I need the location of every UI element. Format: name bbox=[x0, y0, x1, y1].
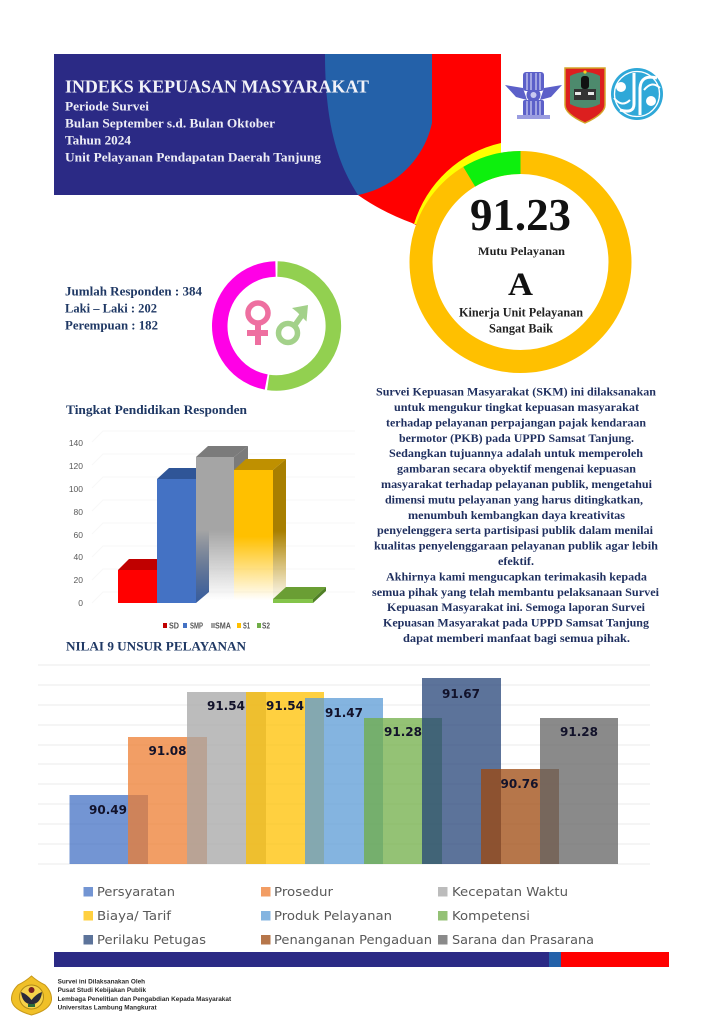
legend: service elements: Persyaratan bbox=[97, 884, 175, 899]
description paragraph: Kepuasan Masyarakat ini. Semoga laporan Survei bbox=[387, 600, 646, 614]
bar: SD bbox=[118, 559, 168, 603]
shape: yellow rim bbox=[414, 143, 501, 226]
description paragraph bbox=[372, 385, 660, 645]
value labels: 91.67 bbox=[442, 687, 480, 701]
value labels: 91.08 bbox=[149, 744, 186, 758]
icon: winged emblem bbox=[505, 72, 562, 119]
shape: red header accent bbox=[358, 54, 501, 232]
description paragraph: Sedangkan tujuannya adalah untuk memperoleh bbox=[389, 446, 643, 460]
respondent counts bbox=[65, 284, 202, 332]
footer colour bar bbox=[54, 952, 669, 967]
legend: service elements: Kompetensi bbox=[452, 908, 530, 923]
value labels bbox=[89, 687, 598, 817]
3d bar chart: education bbox=[69, 431, 355, 630]
footer logo bbox=[11, 976, 52, 1015]
survey period text: Unit Pelayanan Pendapatan Daerah Tanjung bbox=[65, 150, 322, 165]
bars bbox=[70, 678, 618, 864]
description paragraph: penyelenggera serta partisipasi publik dalam menilai bbox=[377, 523, 654, 537]
ring: gauge amber bbox=[421, 162, 620, 362]
bar chart: nine service elements bbox=[38, 665, 650, 864]
description paragraph: gambaran secara obyektif mengenai kepuasan bbox=[397, 462, 636, 476]
y axis labels: 100 bbox=[69, 484, 83, 494]
arc: male share bbox=[268, 269, 333, 383]
legend: service elements: Perilaku Petugas bbox=[97, 932, 206, 947]
value labels: 91.28 bbox=[560, 725, 598, 739]
icon: male symbol bbox=[278, 305, 308, 342]
shape: navy header panel bbox=[54, 54, 358, 195]
respondent counts: Perempuan : 182 bbox=[65, 317, 158, 332]
chart legend: SMA bbox=[215, 622, 231, 630]
icon: round blue logo bbox=[611, 68, 663, 120]
survey period text: Tahun 2024 bbox=[65, 132, 132, 147]
description paragraph: kualitas penyelenggaraan pelayanan publik agar lebih bbox=[374, 539, 658, 553]
y axis labels: 140 bbox=[69, 438, 83, 448]
bar: S2 bbox=[273, 587, 326, 603]
legend: service elements: Prosedur bbox=[274, 884, 334, 899]
value labels: 90.49 bbox=[89, 803, 127, 817]
respondent counts: Jumlah Responden : 384 bbox=[65, 284, 202, 299]
footer credit text: Pusat Studi Kebijakan Publik bbox=[58, 987, 146, 994]
ring: gauge green segment bbox=[463, 151, 520, 187]
description paragraph: bermotor (PKB) pada UPPD Samsat Tanjung. bbox=[399, 431, 634, 445]
chart legend: S2 bbox=[262, 622, 270, 630]
survey period text: Bulan September s.d. Bulan Oktober bbox=[65, 115, 275, 130]
bar: S1 bbox=[234, 459, 286, 603]
grade letter: A bbox=[508, 267, 533, 303]
value labels: 91.54 bbox=[207, 699, 245, 713]
description paragraph: dapat memberi manfaat bagi semua pihak. bbox=[403, 631, 630, 645]
description paragraph: semua pihak yang telah membantu pelaksanaan Survei bbox=[372, 585, 660, 599]
y axis labels: 60 bbox=[74, 530, 83, 540]
label: mutu pelayanan: Mutu Pelayanan bbox=[478, 244, 565, 258]
heading: nine elements: NILAI 9 UNSUR PELAYANAN bbox=[66, 639, 247, 654]
label: sangat baik: Sangat Baik bbox=[489, 322, 553, 336]
gender donut bbox=[220, 269, 333, 383]
description paragraph: masyarakat terhadap pelayanan publik, mengetahui bbox=[381, 477, 653, 491]
chart legend bbox=[163, 622, 270, 630]
value labels: 91.28 bbox=[384, 725, 422, 739]
legend: service elements: Produk Pelayanan bbox=[274, 908, 392, 923]
footer credit text: Lembaga Penelitian dan Pengabdian Kepada Masyarakat bbox=[58, 996, 232, 1003]
bar: SMA bbox=[196, 446, 248, 603]
legend: service elements: Penanganan Pengaduan bbox=[274, 932, 432, 947]
y axis labels: 40 bbox=[74, 552, 83, 562]
score value: 91.23 bbox=[470, 190, 571, 240]
value labels: 91.47 bbox=[325, 706, 363, 720]
y axis labels: 120 bbox=[69, 461, 83, 471]
survey period text bbox=[65, 99, 322, 165]
legend: service elements bbox=[84, 884, 594, 947]
description paragraph: efektif. bbox=[498, 554, 534, 568]
chart legend: S1 bbox=[243, 622, 250, 630]
description paragraph: dimensi mutu pelayanan yang harus ditingkatkan, bbox=[385, 492, 643, 506]
y axis labels bbox=[69, 438, 83, 608]
chart legend: SMP bbox=[190, 622, 203, 630]
icon: female symbol bbox=[247, 303, 268, 345]
footer credit text: Universitas Lambung Mangkurat bbox=[58, 1005, 157, 1012]
value labels: 90.76 bbox=[501, 777, 538, 791]
label: kinerja: Kinerja Unit Pelayanan bbox=[459, 306, 583, 320]
description paragraph: Kepuasan Masyarakat pada UPPD Samsat Tanjung bbox=[383, 616, 649, 630]
y axis labels: 80 bbox=[74, 507, 83, 517]
footer credit text bbox=[58, 978, 232, 1012]
chart legend: SD bbox=[169, 622, 179, 630]
y axis labels: 0 bbox=[78, 598, 83, 608]
y axis labels: 20 bbox=[74, 575, 83, 585]
logos bbox=[505, 68, 663, 123]
description paragraph: menumbuh kembangkan daya kreativitas bbox=[408, 508, 625, 522]
legend: service elements: Kecepatan Waktu bbox=[452, 884, 568, 899]
shape: blue curved accent bbox=[325, 54, 432, 195]
respondent counts: Laki – Laki : 202 bbox=[65, 300, 157, 315]
footer credit text: Survei ini Dilaksanakan Oleh bbox=[58, 978, 145, 985]
description paragraph: terhadap pelayanan perpajangan pajak kendaraan bbox=[386, 415, 646, 429]
heading: education chart: Tingkat Pendidikan Responden bbox=[66, 402, 248, 417]
title: INDEKS KEPUASAN MASYARAKAT bbox=[65, 76, 369, 96]
legend: service elements: Sarana dan Prasarana bbox=[452, 932, 594, 947]
description paragraph: untuk mengukur tingkat kepuasan masyarakat bbox=[394, 400, 639, 414]
legend: service elements: Biaya/ Tarif bbox=[97, 908, 172, 923]
bar: SMP bbox=[157, 468, 209, 603]
gauge: overall score bbox=[414, 143, 620, 362]
arc: female share bbox=[220, 269, 276, 382]
survey period text: Periode Survei bbox=[65, 99, 149, 114]
header banner bbox=[54, 54, 501, 232]
description paragraph: Akhirnya kami mengucapkan terimakasih kepada bbox=[386, 569, 647, 583]
description paragraph: Survei Kepuasan Masyarakat (SKM) ini dilaksanakan bbox=[376, 385, 656, 399]
icon: provincial shield bbox=[565, 68, 605, 123]
value labels: 91.54 bbox=[266, 699, 304, 713]
